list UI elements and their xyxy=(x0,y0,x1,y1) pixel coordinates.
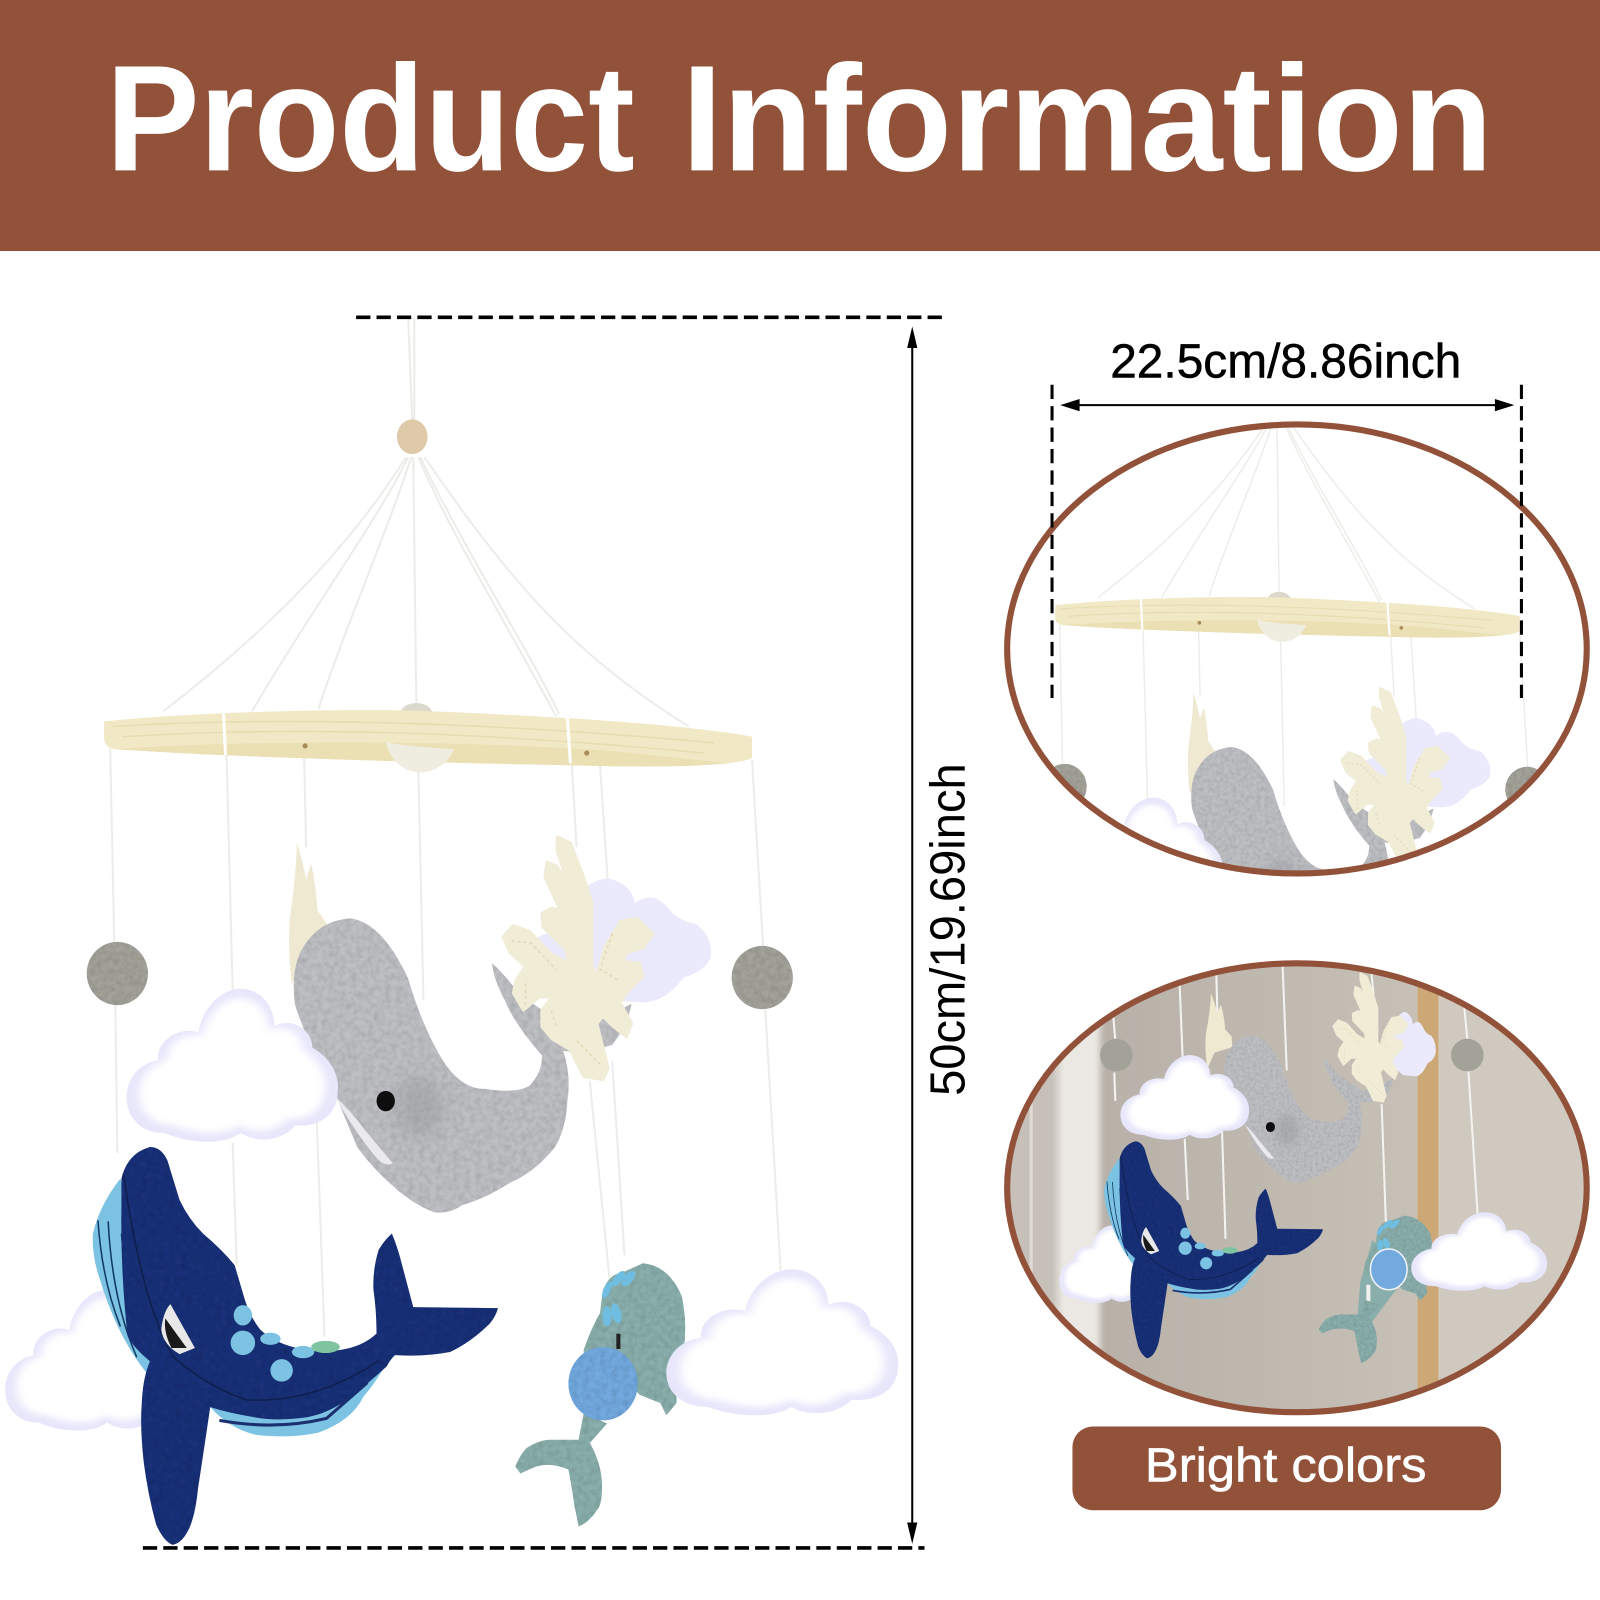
navy whale xyxy=(1104,1141,1323,1358)
white cloud upper left xyxy=(127,989,338,1142)
teal whale body link with white belly stripe xyxy=(1358,1240,1397,1322)
white cloud lower right xyxy=(666,1269,898,1415)
hanging strings xyxy=(110,318,781,1337)
grey whale xyxy=(294,918,632,1213)
left spout xyxy=(1205,994,1232,1069)
title: Information xyxy=(682,34,1493,203)
felt ball above hoop xyxy=(400,703,433,726)
height dimension: 50cm/19.69inch xyxy=(143,317,975,1548)
title: Product xyxy=(106,34,635,203)
top circle: hoop close-up xyxy=(1004,421,1590,876)
title xyxy=(106,34,1493,203)
grey balls xyxy=(1100,1039,1484,1071)
cloud upper xyxy=(1120,1055,1249,1140)
badge: bright colors xyxy=(1072,1427,1501,1510)
bottom circle: room photo xyxy=(1005,961,1592,1414)
lavender cloud behind spout xyxy=(523,879,711,1002)
wooden bead xyxy=(397,419,428,454)
felt ball under hoop xyxy=(386,742,454,772)
badge: bright colors: Bright colors xyxy=(1145,1440,1427,1493)
cloud lower right xyxy=(1411,1212,1547,1291)
cloud behind spout xyxy=(1392,1012,1436,1076)
teal whale xyxy=(1319,1216,1433,1363)
right spout xyxy=(1333,973,1408,1102)
blue felt ball xyxy=(568,1347,638,1420)
header band xyxy=(0,0,1600,251)
grey felt ball right xyxy=(732,946,793,1009)
height label: 50cm/19.69inch xyxy=(921,763,975,1096)
product photo: hanging whale mobile xyxy=(5,318,898,1545)
left water spout xyxy=(289,843,328,985)
navy humpback whale xyxy=(93,1147,498,1545)
teal whale xyxy=(515,1263,685,1527)
right water spout xyxy=(503,837,653,1080)
white cloud lower left xyxy=(5,1290,194,1431)
width dimension: 22.5cm/8.86inch: 22.5cm/8.86inch xyxy=(1110,336,1461,389)
grey whale xyxy=(1224,1036,1393,1183)
width dimension: 22.5cm/8.86inch xyxy=(1052,336,1521,698)
blue ball xyxy=(1370,1249,1407,1290)
bamboo hoop xyxy=(104,710,752,767)
grey felt ball left xyxy=(87,942,148,1005)
cloud lower left xyxy=(1059,1226,1133,1303)
